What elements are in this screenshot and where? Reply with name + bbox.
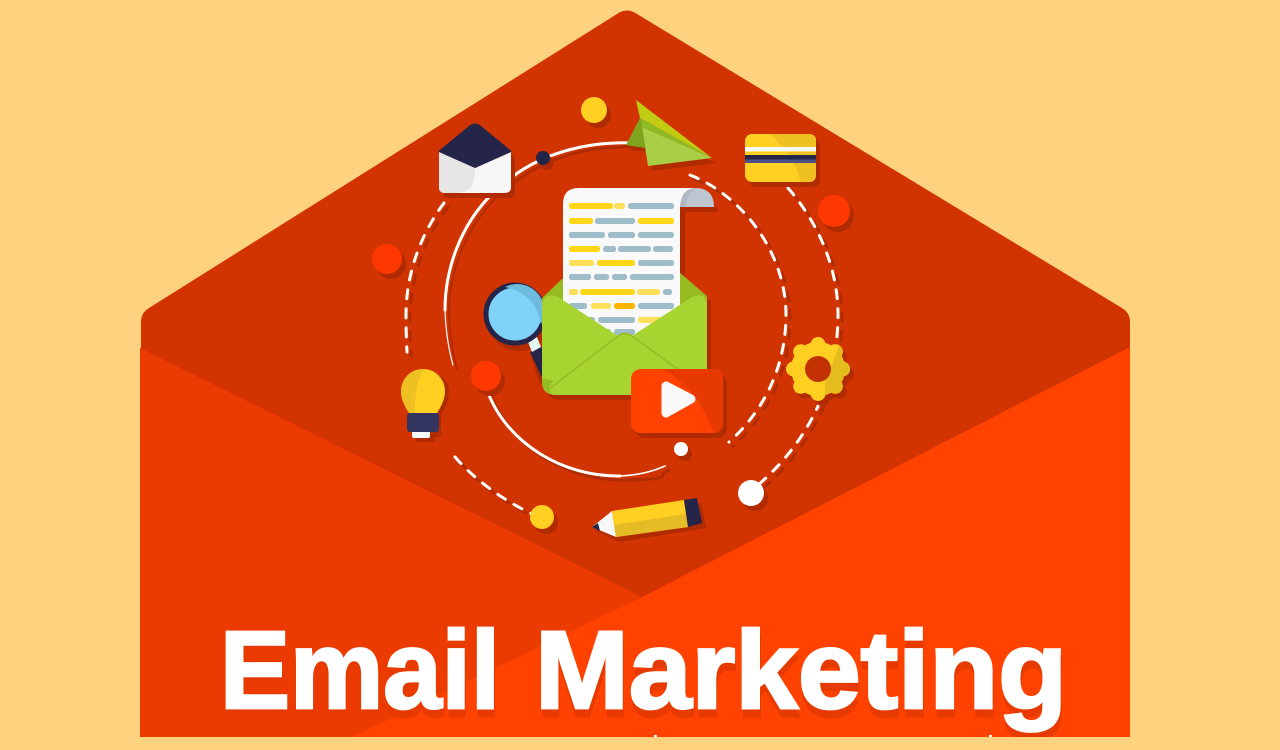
icon: magnifying glass xyxy=(486,284,552,384)
envelope corner shade xyxy=(542,378,554,394)
icon: credit card xyxy=(745,134,820,187)
paper roll xyxy=(680,188,714,207)
orbit shadows xyxy=(410,147,842,518)
envelope left fold xyxy=(140,348,642,737)
clipped next-line text specks xyxy=(654,735,992,737)
envelope front xyxy=(542,295,707,395)
document with text lines xyxy=(542,188,718,380)
envelope shadow xyxy=(546,300,711,400)
title: Email Marketing: Email xyxy=(220,609,500,732)
envelope back flap xyxy=(141,10,1130,737)
solid white arcs xyxy=(445,143,665,476)
dot faces xyxy=(581,97,607,123)
magnifier shadow xyxy=(487,287,551,351)
envelope right fold xyxy=(352,347,1130,737)
paper shadow xyxy=(680,207,685,302)
main green envelope xyxy=(542,295,711,400)
magnifier handle xyxy=(530,346,552,378)
icon: light bulb xyxy=(401,369,449,442)
decorative dots xyxy=(372,97,854,534)
title: Email Marketing: Marketing xyxy=(536,617,1068,740)
icon: pencil xyxy=(592,498,706,542)
title: Email Marketing xyxy=(220,609,1068,740)
icon: small envelope xyxy=(439,124,515,198)
title: Email Marketing: Marketing xyxy=(535,609,1067,732)
dashed white arcs xyxy=(406,175,838,514)
illustration: email marketing envelope xyxy=(140,10,1130,737)
paper sheet xyxy=(563,188,696,345)
envelope back xyxy=(542,272,707,380)
cropped bottom band xyxy=(0,737,1280,750)
dashed and solid orbit lines xyxy=(406,143,842,518)
dot shadows xyxy=(376,102,854,534)
document text rows xyxy=(569,203,674,335)
magnifier lens xyxy=(486,285,544,343)
icon: gear xyxy=(786,337,854,406)
icon: video play button xyxy=(631,369,727,438)
icon: paper plane xyxy=(626,100,716,171)
envelope lower flap xyxy=(548,334,690,390)
title: Email Marketing: Email xyxy=(221,617,501,740)
